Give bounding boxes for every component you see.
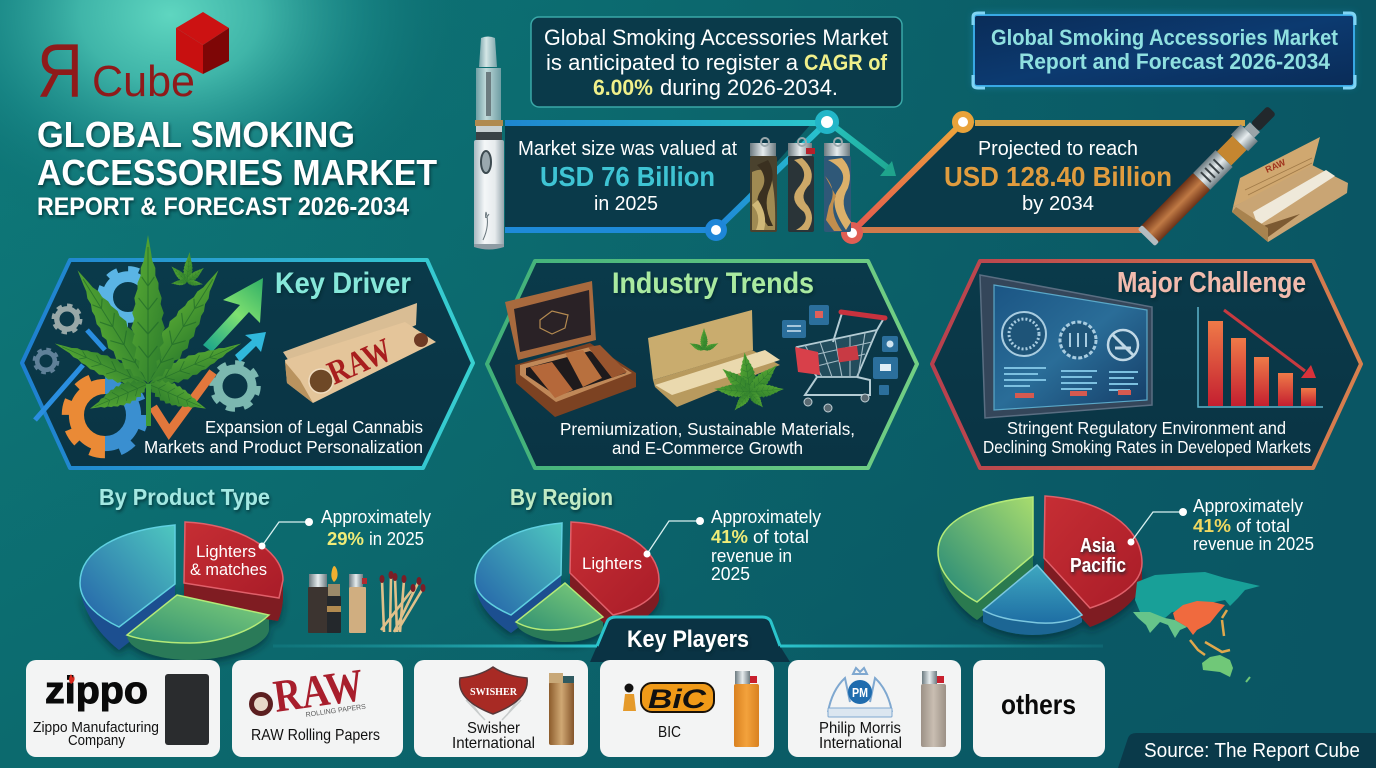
panel: Key Players tab: Key Players <box>627 626 749 653</box>
icon: gold lighter <box>549 673 574 745</box>
logo wordmark: R <box>37 29 83 114</box>
card: others: others <box>1001 689 1076 720</box>
label: Asia Pacific: Asia <box>1080 535 1116 557</box>
card: others <box>973 660 1105 757</box>
card: RAW <box>232 659 403 757</box>
icon: RAW rolling paper: RAW <box>322 332 398 392</box>
logo: RAW <box>249 659 367 722</box>
callout: Asia Pacific share: revenue in 2025 <box>1193 534 1314 554</box>
logo: RCube <box>37 12 229 114</box>
arrow head <box>880 161 896 176</box>
logo: RAW: RAW <box>270 659 367 722</box>
description: Premiumization, Sustainable Materials, <box>560 419 855 439</box>
heading: By Region: By Region <box>510 484 613 510</box>
icon: rolling paper pack: RAW <box>1264 157 1287 175</box>
callout: region share: of total <box>753 527 809 547</box>
logo: zippo: zippo <box>45 670 148 712</box>
report title badge: Report and Forecast 2026-2034 <box>1019 49 1331 74</box>
icon: lighters and matches <box>308 566 426 633</box>
icon: wood vape pen right <box>1138 102 1280 246</box>
logo: BIC: BiC <box>648 684 707 714</box>
chart: declining bars <box>1198 307 1323 407</box>
heading: By Product Type: By Product Type <box>99 484 270 510</box>
projected 2034 text: USD 128.40 Billion <box>944 161 1172 192</box>
label: lighters and matches: Lighters <box>196 542 256 561</box>
icon: premium paper pack with leaf <box>648 310 784 413</box>
description: and E-Commerce Growth <box>612 438 803 458</box>
CAGR callout: 6.00% <box>593 75 653 100</box>
report title badge <box>973 13 1355 88</box>
lighter three <box>824 138 851 232</box>
label: lighters and matches <box>190 542 267 579</box>
CAGR callout: CAGR of <box>804 50 888 75</box>
logo wordmark: Cube <box>92 57 195 106</box>
label: lighters and matches: & matches <box>190 560 267 579</box>
panel: Key Driver <box>22 235 473 468</box>
card: Zippo <box>26 660 220 757</box>
stat panel backgrounds <box>505 123 1245 230</box>
card: Philip Morris: Philip Morris <box>819 720 901 737</box>
card: Swisher: Swisher <box>467 720 521 737</box>
card: Philip Morris: International <box>819 735 902 752</box>
card: RAW: RAW Rolling Papers <box>251 727 380 744</box>
panel: Major Challenge <box>932 261 1361 468</box>
callout: region share: 41% <box>711 527 748 547</box>
source footer <box>1118 733 1376 768</box>
callout: product share <box>321 507 431 549</box>
CAGR callout: is anticipated to register a <box>546 50 799 75</box>
description: Declining Smoking Rates in Developed Markets <box>983 437 1311 457</box>
projected 2034 text: Projected to reach <box>978 138 1138 160</box>
chart: product type pie <box>80 518 313 660</box>
label: Asia Pacific <box>1070 535 1126 577</box>
card: Zippo: Company <box>68 732 125 749</box>
title: GLOBAL SMOKING <box>37 114 355 155</box>
logo: Swisher shield <box>460 667 527 720</box>
icon: rolling paper pack <box>1232 137 1348 242</box>
panel: Industry Trends <box>487 261 917 468</box>
heading: Major Challenge <box>1117 267 1306 299</box>
description <box>144 417 423 457</box>
projected 2034 text: by 2034 <box>1022 193 1094 215</box>
source footer: Source: The Report Cube <box>1144 740 1360 762</box>
icon: Asia Pacific map <box>1133 572 1260 682</box>
description <box>560 419 855 458</box>
icon: cannabis leaf <box>50 235 246 426</box>
card: BIC <box>600 660 774 757</box>
CAGR callout: during 2026-2034. <box>660 75 838 100</box>
description: Expansion of Legal Cannabis <box>205 417 423 437</box>
description <box>983 418 1311 457</box>
logo: PM crest <box>828 668 892 717</box>
market size 2025 text: in 2025 <box>594 193 658 215</box>
icon: three decorated lighters <box>750 138 851 232</box>
callout: Asia Pacific share: of total <box>1236 516 1290 536</box>
chart: lighters pie <box>475 517 704 642</box>
logo: Swisher shield: SWISHER <box>470 686 518 698</box>
callout: Asia Pacific share: Approximately <box>1193 496 1303 516</box>
icon: background gears and arrows <box>34 269 266 454</box>
title: REPORT & FORECAST 2026-2034 <box>37 193 409 221</box>
card: BIC: BIC <box>658 724 681 741</box>
logo: PM crest: PM <box>852 685 868 700</box>
panel: Key Players tab <box>273 617 1103 662</box>
icon: orange lighter <box>734 671 759 747</box>
callout: region share: 2025 <box>711 564 750 584</box>
callout: region share: revenue in <box>711 546 792 566</box>
callout: region share: Approximately <box>711 507 821 527</box>
lighter two <box>788 138 815 232</box>
logo wordmark <box>37 29 195 114</box>
CAGR callout: Global Smoking Accessories Market <box>544 25 888 50</box>
icon: wooden lighter case <box>505 281 636 417</box>
card: Swisher <box>414 660 588 757</box>
description: Markets and Product Personalization <box>144 437 423 457</box>
icon: RAW rolling paper <box>283 303 436 403</box>
card: Zippo: Zippo Manufacturing <box>33 719 159 736</box>
title: ACCESSORIES MARKET <box>37 152 437 193</box>
title <box>37 114 437 221</box>
label: lighters: Lighters <box>582 554 642 573</box>
market size timeline lines <box>505 122 1245 232</box>
market size 2025 text: Market size was valued at <box>518 138 737 160</box>
label: Asia Pacific: Pacific <box>1070 555 1126 577</box>
report title badge: Global Smoking Accessories Market <box>991 25 1339 50</box>
callout: Asia Pacific share: 41% <box>1193 516 1231 536</box>
logo: RAW: ROLLING PAPERS <box>305 704 367 719</box>
callout: product share: 29% <box>327 529 364 549</box>
heading: Key Driver <box>275 267 411 300</box>
heading: Industry Trends <box>612 267 814 300</box>
timeline nodes <box>708 113 971 241</box>
callout: product share: in 2025 <box>369 529 424 549</box>
callout: region share <box>711 507 821 584</box>
market size 2025 text <box>518 138 737 215</box>
card: Swisher: International <box>452 735 535 752</box>
projected 2034 text <box>944 138 1172 215</box>
icon: taupe lighter <box>921 671 946 747</box>
chart: Asia Pacific pie <box>938 496 1187 635</box>
icon: black lighter <box>165 674 209 745</box>
CAGR callout <box>531 17 902 107</box>
description: Stringent Regulatory Environment and <box>1007 418 1286 438</box>
icon: red cube <box>176 12 229 74</box>
market size 2025 text: USD 76 Billion <box>540 161 715 192</box>
logo: BIC <box>623 683 714 714</box>
icon: vape pen left <box>474 36 504 250</box>
icon: shopping cart <box>782 305 898 412</box>
icon: regulatory monitor <box>980 275 1152 418</box>
card: Philip Morris <box>788 660 961 757</box>
callout: product share: Approximately <box>321 507 431 527</box>
lighter one <box>750 138 777 232</box>
callout: Asia Pacific share <box>1193 496 1314 554</box>
